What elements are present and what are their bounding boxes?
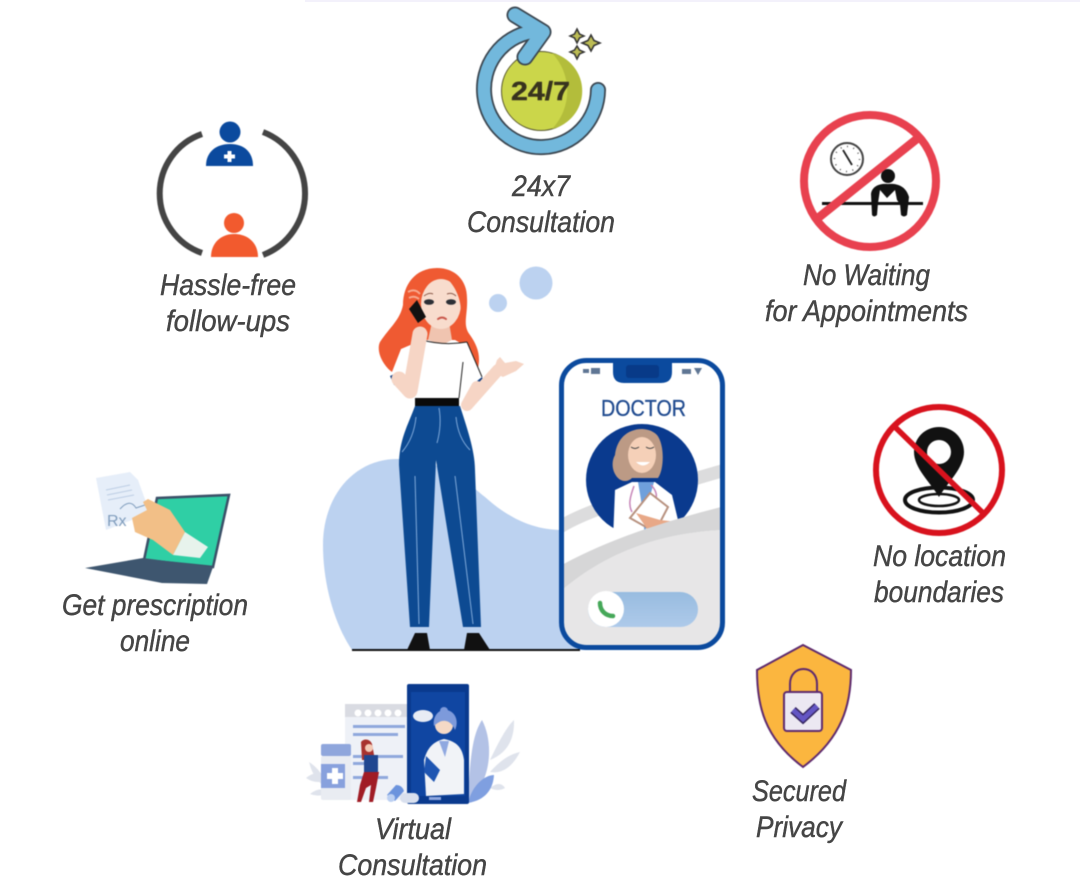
shirt [392,340,482,398]
doctor portrait [586,424,698,540]
notch [613,360,672,383]
phone frame [562,360,722,648]
woman figure [379,268,524,650]
label: boundaries [874,576,1004,609]
label: Secured [752,775,847,808]
call slider [588,591,698,627]
label: Hassle-free [160,269,296,302]
item: virtual consultation [306,684,520,882]
neck and face [428,322,452,345]
jeans [399,406,481,627]
item: 24x7 consultation [467,15,615,239]
central illustration: woman calling doctor [323,266,725,651]
icon: 24/7 arrow: 24/7 [511,76,570,106]
illustration: laptop with prescription: Rx [107,513,127,530]
mobile phone [409,300,426,323]
icon: shield with lock [757,645,851,767]
label: follow-ups [166,305,290,338]
screen title: DOCTOR [601,395,686,421]
shoes [407,633,490,650]
label: Consultation [467,206,615,239]
arms [399,334,420,391]
icon: no location pin [876,407,1002,533]
label: Virtual [375,813,452,846]
illustration: virtual consultation [306,684,520,804]
swoosh background [560,424,725,650]
status icons [583,368,702,375]
icon: 24/7 arrow [484,15,600,147]
thought bubbles [489,266,552,312]
sleeves [390,372,484,389]
smartphone with doctor [560,360,725,650]
label: 24x7 [511,170,571,203]
belt [415,398,459,406]
label: Get prescription [62,589,248,622]
icon: doctor and patient [160,122,305,257]
background blob [323,459,600,650]
label: No Waiting [803,259,930,292]
gray swoosh [560,506,725,592]
item: get prescription online [62,472,248,658]
small woman figure [357,740,379,802]
label: online [120,625,190,658]
label: for Appointments [765,295,968,328]
item: hassle-free follow-ups [160,122,305,338]
label: Consultation [338,849,487,882]
ground line [352,649,580,651]
item: no location boundaries [873,407,1006,609]
facial features [424,293,456,319]
icon: no waiting [804,115,936,247]
hair back [379,268,479,372]
item: secured privacy [752,645,851,844]
illustration: laptop with prescription [85,472,229,584]
label: Privacy [756,811,844,844]
label: No location [873,540,1006,573]
item: no waiting for appointments [765,115,968,328]
